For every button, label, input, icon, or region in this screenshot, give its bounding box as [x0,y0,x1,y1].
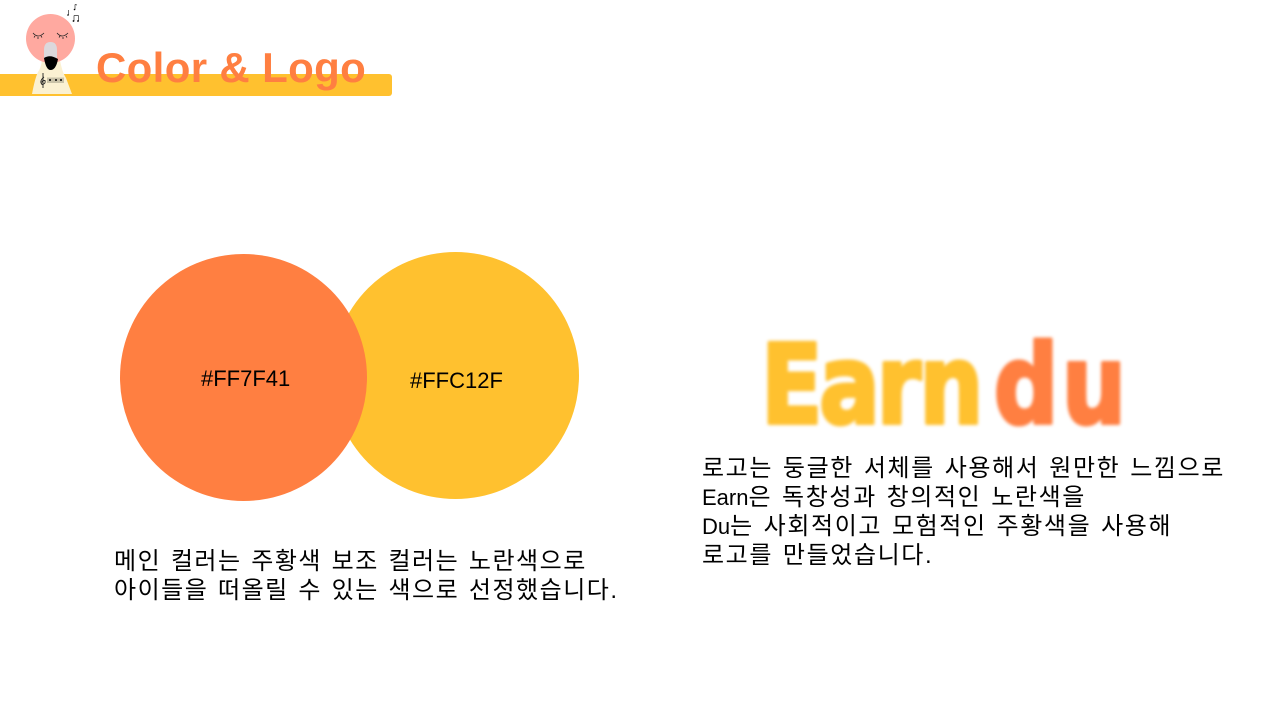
color description: 메인 컬러는 주황색 보조 컬러는 노란색으로 [114,548,587,575]
logo description: Earn은 독창성과 창의적인 노란색을 [702,484,1086,511]
color description [114,548,619,604]
title: Color & Logo [96,44,366,91]
color swatch: main orange [120,254,367,501]
logo: Earndu [761,321,1126,445]
label: orange hex: #FF7F41 [201,366,290,391]
logo description: Du는 사회적이고 모험적인 주황색을 사용해 [702,513,1172,540]
label: yellow hex: #FFC12F [410,368,503,393]
color swatch: secondary yellow [332,252,579,499]
icon: flamingo mascot [26,4,79,94]
logo description: 로고를 만들었습니다. [702,542,933,569]
logo description [702,455,1225,569]
logo description: 로고는 둥글한 서체를 사용해서 원만한 느낌으로 [702,455,1225,482]
header bar [0,74,392,96]
color description: 아이들을 떠올릴 수 있는 색으로 선정했습니다. [114,577,619,604]
